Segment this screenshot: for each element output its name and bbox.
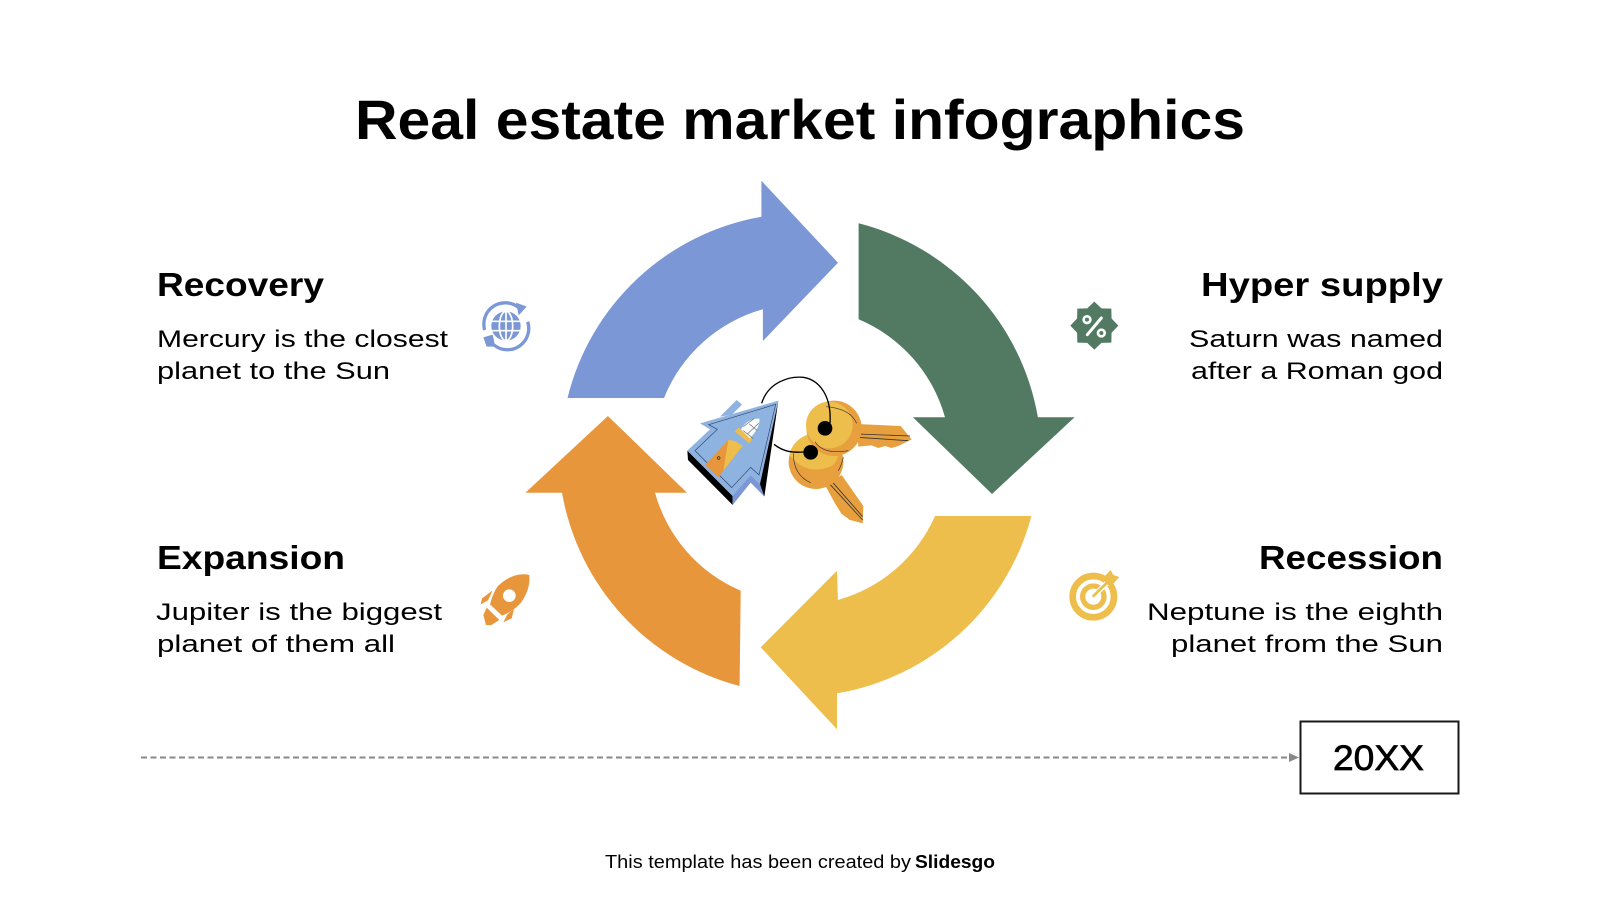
year box [1300,722,1458,794]
title: Real estate market infographics [355,88,1245,151]
block: recovery [157,266,448,385]
block: expansion [156,539,442,658]
icon: target [1073,570,1119,617]
arrow: hyper supply (green) [859,223,1075,494]
description [1189,326,1443,385]
heading: Recession [1259,539,1443,576]
cycle diagram [525,181,1075,729]
description: Mercury is the closest [157,326,448,353]
description: planet of them all [157,631,395,658]
heading: Recovery [157,266,325,303]
description: Jupiter is the biggest [156,599,442,626]
block: hyper supply [1189,266,1444,385]
arrow: recession (yellow) [761,516,1031,729]
block: recession [1147,539,1443,658]
icon: globe with arrows [483,303,529,350]
footer credit: This template has been created by [605,852,911,872]
icon: house keychain [687,400,778,505]
description: Saturn was named [1189,326,1443,353]
icon: keys [789,401,912,523]
heading: Hyper supply [1201,266,1444,303]
arrow: recovery (blue) [568,181,838,398]
key ring [762,377,830,452]
arrow: expansion (orange) [525,416,741,686]
description [157,326,448,385]
description: planet from the Sun [1171,631,1443,658]
heading: Expansion [157,539,345,576]
timeline arrow [141,753,1299,762]
description [156,599,442,658]
year box: 20XX [1333,739,1424,778]
description: planet to the Sun [157,358,390,385]
description: after a Roman god [1191,358,1443,385]
description [1147,599,1443,658]
icon: percent badge [1070,302,1118,350]
footer credit: Slidesgo [915,852,995,872]
center illustration: house keychain and keys [687,377,912,523]
icon: rocket [481,574,529,625]
description: Neptune is the eighth [1147,599,1443,626]
